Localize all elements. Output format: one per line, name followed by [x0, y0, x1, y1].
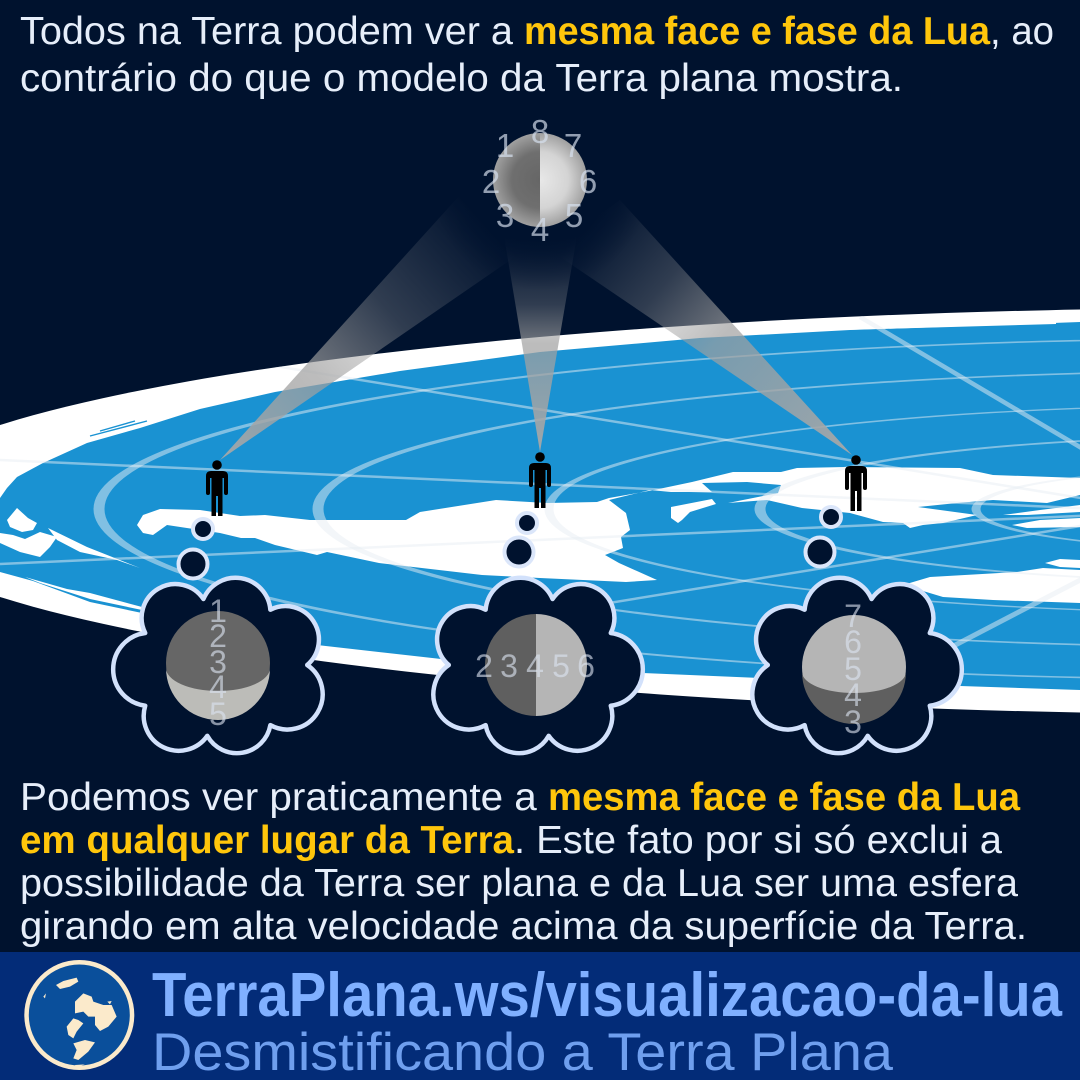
top heading: Todos na Terra podem ver a	[20, 10, 524, 53]
phase numbers: 2	[475, 648, 493, 684]
footer band	[0, 952, 1080, 1080]
thought bubbles: right	[806, 507, 841, 566]
phase numbers: 5	[844, 651, 862, 687]
phase numbers: 6	[844, 624, 862, 660]
moon with phase numbers: 8	[531, 113, 549, 150]
phase numbers: 1	[209, 593, 227, 629]
bottom paragraph: mesma face e fase da Lua	[548, 776, 1020, 819]
moon with phase numbers: 2	[482, 163, 500, 200]
light beam: right observer	[550, 200, 852, 455]
thought bubbles: left	[178, 519, 213, 578]
moon with phase numbers: 5	[565, 197, 583, 234]
phase numbers: 5	[209, 696, 227, 732]
phase numbers: 5	[552, 648, 570, 684]
thought cloud: left view	[113, 578, 323, 753]
observer: centre	[529, 452, 551, 508]
phase numbers: 4	[844, 677, 862, 713]
phase numbers	[209, 593, 227, 732]
phase numbers: 3	[844, 704, 862, 740]
light beam: left observer	[220, 195, 525, 460]
thought cloud: centre view	[433, 578, 643, 753]
bottom paragraph: girando em alta velocidade acima da superfície da Terra.	[20, 905, 1027, 948]
phase numbers	[475, 648, 595, 684]
bottom paragraph: Podemos ver praticamente a	[20, 776, 548, 819]
bottom paragraph	[20, 776, 1027, 948]
cloud shape	[113, 578, 323, 753]
bottom paragraph: possibilidade da Terra ser plana e da Lua ser uma esfera	[20, 862, 1018, 905]
phase numbers	[844, 598, 862, 740]
cloud shape	[752, 578, 962, 753]
latitude rings and meridians	[0, 317, 1080, 679]
moon with phase numbers: 1	[496, 127, 514, 164]
moon with phase numbers: 6	[579, 163, 597, 200]
moon with phase numbers: 4	[531, 211, 549, 248]
phase numbers: 4	[209, 669, 227, 705]
moon view	[485, 614, 587, 716]
top heading: , ao	[990, 10, 1054, 53]
moon view	[802, 615, 906, 724]
moon with phase numbers: 7	[564, 127, 582, 164]
moon view	[166, 611, 270, 720]
moon glow	[430, 70, 650, 290]
top heading: contrário do que o modelo da Terra plana mostra.	[20, 57, 903, 100]
thought cloud: right view	[752, 578, 962, 753]
phase numbers: 3	[209, 644, 227, 680]
disc rim	[0, 308, 1080, 714]
phase numbers: 6	[577, 648, 595, 684]
cloud shape	[433, 578, 643, 753]
rim streaks	[90, 421, 147, 436]
top heading: mesma face e fase da Lua	[524, 10, 990, 53]
light beam: centre observer	[503, 230, 578, 452]
footer logo: flat earth globe	[24, 960, 134, 1070]
phase numbers: 4	[526, 648, 544, 684]
bottom paragraph: em qualquer lugar da Terra	[20, 819, 514, 862]
observer: left	[206, 460, 228, 516]
bottom paragraph: . Este fato por si só exclui a	[514, 819, 1002, 862]
continents	[0, 322, 1080, 610]
moon with phase numbers	[482, 113, 597, 248]
thought bubbles: centre	[504, 513, 537, 566]
top heading	[20, 10, 1054, 100]
observer: right	[845, 455, 867, 511]
phase numbers: 3	[500, 648, 518, 684]
flat earth disc	[0, 308, 1080, 714]
phase numbers: 7	[844, 598, 862, 634]
moon with phase numbers: 3	[496, 197, 514, 234]
phase numbers: 2	[209, 618, 227, 654]
ocean	[0, 322, 1080, 690]
